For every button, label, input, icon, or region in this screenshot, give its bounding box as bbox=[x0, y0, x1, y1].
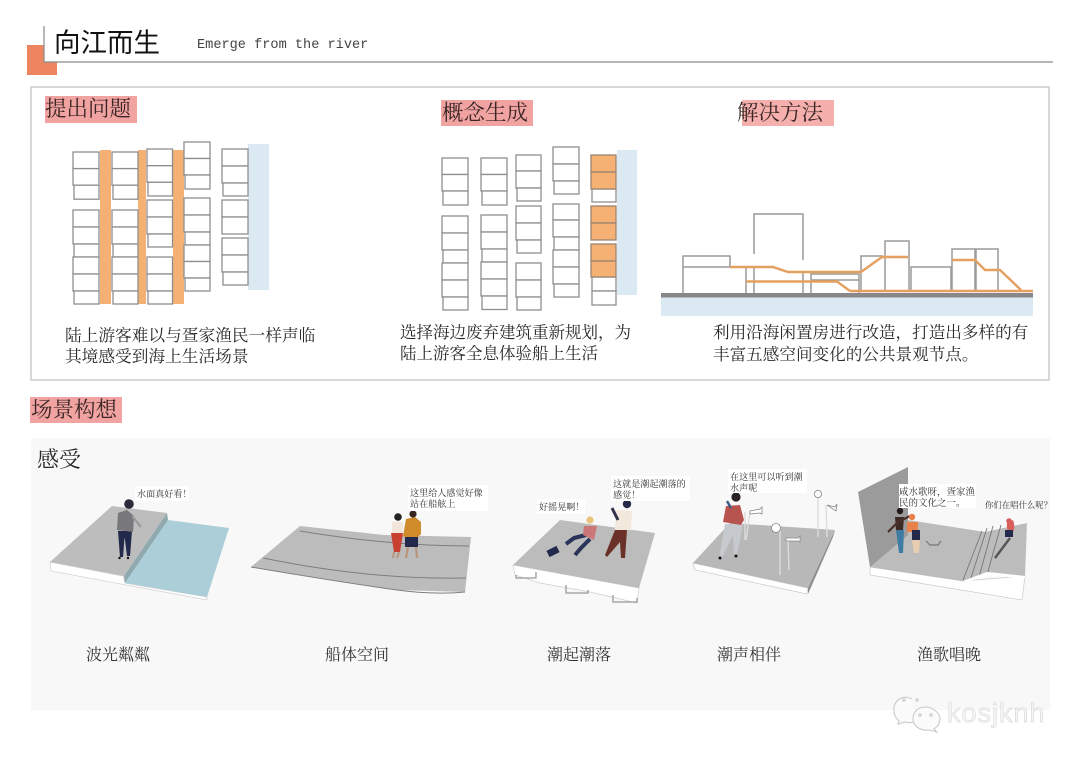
speech bubble: 感觉！ bbox=[613, 489, 640, 500]
watermark: wechat account bbox=[894, 697, 1046, 732]
caption: hull space: 船体空间 bbox=[325, 646, 389, 664]
speech bubble: 站在船舷上 bbox=[410, 498, 455, 509]
heading: raise the problem: 提出问题 bbox=[45, 97, 131, 121]
caption: rising and falling tide: 潮起潮落 bbox=[547, 645, 611, 664]
heading: solution: 解决方法 bbox=[737, 101, 824, 125]
speech bubble: 咸水歌呀，疍家渔 bbox=[899, 486, 976, 498]
text block: solution bbox=[713, 323, 1028, 364]
speech bubble: 水声呢 bbox=[730, 482, 757, 493]
speech bubble bbox=[611, 476, 690, 501]
panel frame bbox=[31, 87, 1049, 380]
diagram: concept site plan bbox=[442, 147, 637, 310]
caption: sparkling water: 波光粼粼 bbox=[86, 646, 151, 664]
heading: concept generation: 概念生成 bbox=[442, 101, 528, 125]
header: title bar bbox=[27, 26, 1053, 75]
icon: orange square accent bbox=[27, 45, 57, 75]
scene 3: rising and falling tide bbox=[513, 476, 690, 603]
caption: tide sounds: 潮声相伴 bbox=[717, 645, 781, 664]
subtitle: Emerge from the river bbox=[197, 38, 368, 53]
panel: scene concept bbox=[31, 438, 1052, 710]
speech bubble bbox=[899, 484, 976, 509]
speech bubble bbox=[537, 499, 585, 514]
caption: fishing songs: 渔歌唱晚 bbox=[917, 646, 981, 664]
panel label: feeling: 感受 bbox=[37, 447, 81, 472]
scene 4: tide sounds bbox=[693, 469, 837, 594]
speech bubble bbox=[135, 486, 192, 501]
panel: problem, concept, solution bbox=[31, 87, 1049, 380]
diagram: solution section bbox=[661, 214, 1033, 316]
diagram: problem site plan bbox=[73, 142, 269, 304]
speech bubble: 民的文化之一。 bbox=[899, 497, 966, 509]
text block: concept bbox=[400, 323, 631, 363]
heading: scene concept: 场景构想 bbox=[31, 398, 118, 422]
text block: problem bbox=[65, 325, 316, 366]
scene 2: hull space bbox=[251, 485, 488, 593]
scene 5: fishing songs at dusk bbox=[858, 467, 1052, 600]
icon: chat bubbles bbox=[894, 697, 940, 732]
speech bubble bbox=[408, 485, 488, 511]
header rule lines bbox=[44, 26, 1053, 62]
speech bubble: 在这里可以听到潮 bbox=[730, 471, 803, 482]
speech bubble: 这就是潮起潮落的 bbox=[613, 478, 686, 489]
panel background bbox=[31, 438, 1050, 710]
speech bubble: 水面真好看！ bbox=[137, 488, 192, 499]
speech bubble: 这里给人感觉好像 bbox=[410, 487, 483, 498]
title: 向江而生 bbox=[54, 28, 160, 58]
text block: problem: 其境感受到海上生活场景 bbox=[65, 347, 249, 366]
text block: concept: 选择海边废弃建筑重新规划，为 bbox=[400, 323, 631, 342]
text block: problem: 陆上游客难以与疍家渔民一样声临 bbox=[65, 325, 316, 345]
speech bubble: 好摇晃啊！ bbox=[539, 501, 584, 512]
text block: solution: 丰富五感空间变化的公共景观节点。 bbox=[713, 344, 978, 364]
speech bubble bbox=[728, 469, 807, 493]
watermark text: kosjknh bbox=[947, 698, 1046, 728]
scene 1: sparkling water bbox=[50, 486, 229, 600]
speech bubble: 你们在唱什么呢？ bbox=[985, 500, 1052, 510]
text block: solution: 利用沿海闲置房进行改造，打造出多样的有 bbox=[713, 323, 1028, 342]
text block: concept: 陆上游客全息体验船上生活 bbox=[400, 344, 598, 363]
